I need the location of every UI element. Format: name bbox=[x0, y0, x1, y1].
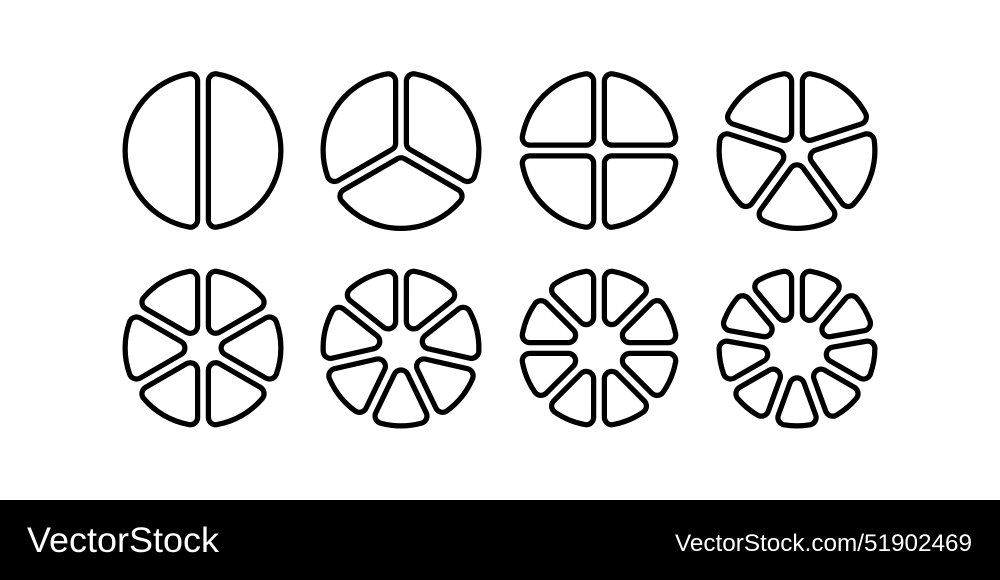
segment bbox=[228, 324, 274, 372]
segment bbox=[354, 276, 405, 330]
circle divided into 8 segments bbox=[528, 277, 670, 419]
segment bbox=[397, 276, 448, 330]
segment bbox=[521, 72, 615, 166]
segment bbox=[216, 81, 274, 220]
segment bbox=[558, 277, 600, 323]
footer bar bbox=[0, 500, 1000, 580]
segment bbox=[387, 69, 489, 190]
segment bbox=[785, 76, 863, 151]
segment bbox=[767, 172, 827, 221]
circle divided into 5 segments bbox=[721, 76, 873, 221]
circle divided into 4 segments bbox=[521, 72, 677, 229]
segment bbox=[726, 343, 762, 372]
segment bbox=[785, 385, 809, 419]
segment bbox=[808, 128, 873, 201]
segment bbox=[743, 369, 782, 410]
circle divided into 2 segments bbox=[132, 81, 274, 220]
segment bbox=[195, 275, 259, 338]
segment bbox=[558, 373, 600, 419]
footer image id text: VectorStock.com/51902469 bbox=[675, 530, 972, 557]
segment bbox=[132, 81, 190, 220]
segment bbox=[347, 165, 455, 221]
segment bbox=[195, 358, 259, 421]
segment bbox=[762, 278, 795, 317]
segment bbox=[132, 324, 178, 372]
segment bbox=[334, 352, 390, 406]
circle divided into 9 segments bbox=[726, 278, 868, 419]
segment bbox=[412, 352, 468, 406]
segment bbox=[521, 135, 615, 229]
segment bbox=[799, 278, 832, 317]
segment bbox=[426, 314, 474, 360]
segment bbox=[583, 72, 677, 166]
segment bbox=[624, 307, 670, 349]
segment bbox=[528, 307, 574, 349]
segment bbox=[528, 347, 574, 389]
segment bbox=[823, 303, 864, 340]
segment bbox=[147, 275, 211, 338]
segment bbox=[731, 76, 809, 151]
segment bbox=[598, 373, 640, 419]
circle divided into 7 segments bbox=[328, 276, 474, 418]
segment bbox=[583, 135, 677, 229]
segment bbox=[598, 277, 640, 323]
segment bbox=[313, 69, 415, 190]
segment bbox=[812, 369, 851, 410]
circle divided into 6 segments bbox=[132, 275, 274, 421]
footer logo text: VectorStock bbox=[27, 521, 220, 560]
circle divided into 3 segments bbox=[313, 69, 489, 221]
segment bbox=[624, 347, 670, 389]
segment bbox=[832, 343, 868, 372]
segment bbox=[721, 128, 786, 201]
segment bbox=[328, 314, 376, 360]
segment bbox=[382, 377, 420, 418]
segment bbox=[730, 303, 771, 340]
segment bbox=[147, 358, 211, 421]
